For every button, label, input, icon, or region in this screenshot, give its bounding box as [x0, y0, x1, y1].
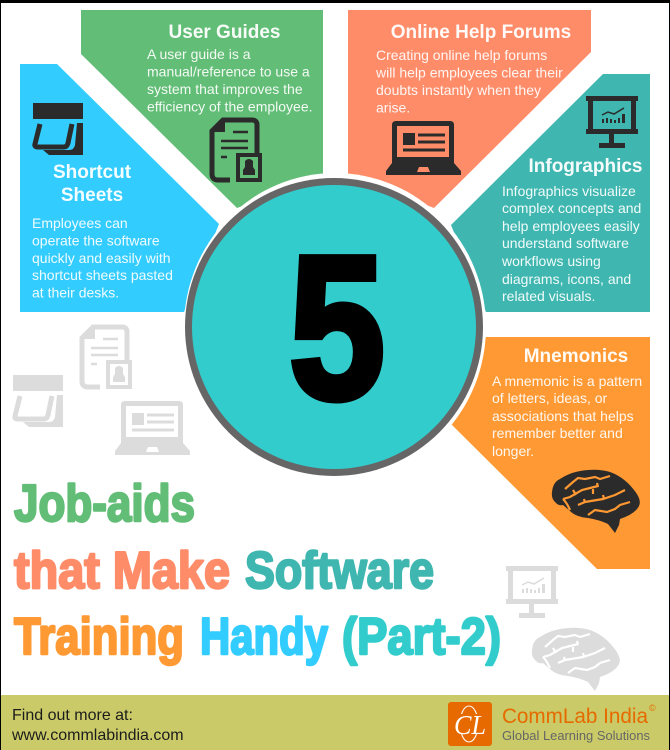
icon: faded document	[82, 327, 132, 389]
heading: user guides: User Guides	[169, 22, 280, 43]
title	[14, 475, 501, 666]
text: mnemonics description: A mnemonic is a pattern	[492, 373, 642, 389]
panel: shortcut sheets	[20, 64, 219, 312]
text: infographics description: related visuals.	[502, 288, 595, 304]
logo: CommLab India: CL	[454, 710, 486, 740]
title: Job-aids	[14, 475, 195, 533]
heading: infographics: Infographics	[528, 156, 643, 177]
icon: faded laptop	[115, 401, 190, 455]
title: Training	[14, 608, 184, 666]
icon: laptop	[386, 121, 461, 175]
text: shortcut sheets description: Employees can	[32, 215, 128, 231]
logo: CommLab India: CommLab India	[502, 705, 648, 728]
text: mnemonics description: of letters, ideas, or	[492, 390, 608, 406]
title: that Make	[14, 542, 230, 600]
text: online help forums description: will help employees clear their	[375, 64, 563, 80]
text: infographics description: diagrams, icons, and	[502, 271, 631, 287]
text: user guides description: system that improves the	[147, 81, 303, 97]
text: mnemonics description: longer.	[492, 443, 534, 459]
text: user guides description: manual/reference to use a	[147, 64, 310, 80]
icon: brain	[552, 470, 640, 533]
text: user guides description: efficiency of the employee.	[147, 98, 313, 114]
footer text: website: www.commlabindia.com	[11, 727, 184, 744]
icon: presentation screen	[586, 96, 638, 148]
panel: infographics	[451, 74, 650, 312]
icon: faded brain	[532, 628, 620, 691]
text: shortcut sheets description: operate the software	[32, 232, 160, 248]
text: shortcut sheets description: at their desks.	[32, 284, 119, 300]
text: shortcut sheets description: quickly and easily with	[32, 250, 171, 266]
logo: CommLab India	[448, 702, 656, 746]
title: Handy	[200, 608, 328, 666]
text: infographics description: workflows using	[501, 253, 601, 269]
logo: CommLab India: Global Learning Solutions	[502, 728, 650, 743]
panel: user guides	[81, 10, 323, 208]
text: infographics description: complex concepts and	[502, 200, 641, 216]
footer bar	[0, 695, 670, 750]
heading: shortcut sheets: Shortcut	[53, 162, 132, 183]
text: infographics description: Infographics visualize	[502, 183, 636, 199]
heading: shortcut sheets: Sheets	[61, 185, 123, 206]
text: online help forums description: doubts instantly when they	[376, 82, 541, 98]
text: online help forums description: Creating online help forums	[376, 47, 547, 63]
text: infographics description: understand software	[502, 235, 629, 251]
panel: online help forums	[348, 10, 591, 208]
heading: mnemonics: Mnemonics	[524, 346, 628, 367]
central circle with number 5	[184, 173, 486, 481]
icon: faded presentation screen	[506, 566, 558, 618]
logo: CommLab India: ©	[649, 703, 656, 713]
icon: faded sticky note	[13, 375, 63, 427]
footer text: website: Find out more at:	[12, 707, 133, 724]
text: mnemonics description: associations that helps	[492, 408, 634, 424]
text: infographics description: help employees easily	[502, 218, 640, 234]
heading: online help forums: Online Help Forums	[391, 22, 571, 43]
panel: mnemonics	[450, 337, 650, 569]
text: user guides description: A user guide is a	[147, 46, 251, 62]
title: Software	[245, 542, 434, 600]
icon: sticky note	[33, 103, 83, 155]
title: (Part-2)	[342, 608, 501, 666]
text: online help forums description: arise.	[376, 100, 410, 116]
text: shortcut sheets description: shortcut sheets pasted	[32, 267, 173, 283]
text: mnemonics description: remember better and	[492, 425, 623, 441]
central circle with number 5: 5	[289, 214, 385, 442]
icon: document with photo	[212, 120, 262, 182]
